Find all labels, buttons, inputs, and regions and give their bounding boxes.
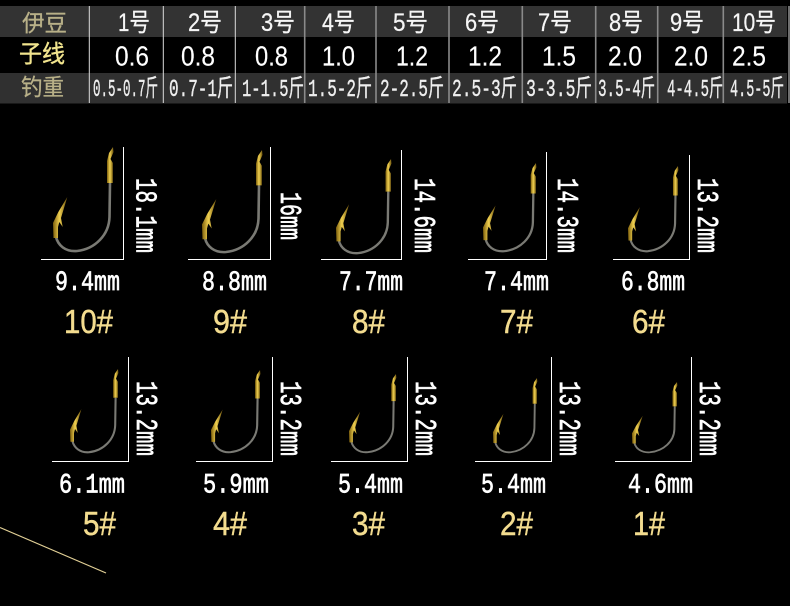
hook 3#: 3# <box>352 505 386 542</box>
hook 6# <box>613 155 723 340</box>
hook 9#: 9# <box>213 303 248 340</box>
hook 10#: 18.1mm <box>126 178 162 253</box>
row 1: model: 1号 <box>118 9 150 37</box>
row 3: fish weight: 1-1.5斤 <box>242 75 304 104</box>
hook 8#: 14.6mm <box>405 178 440 253</box>
row 1: model: 2号 <box>188 9 222 37</box>
hook 1#: 1# <box>633 505 666 542</box>
hook 8#: 7.7mm <box>339 268 403 299</box>
hook 9#: 16mm <box>271 192 306 240</box>
hook 5#: 6.1mm <box>59 471 125 502</box>
row 2: leader line <box>19 40 766 72</box>
row 3: fish weight <box>21 74 784 104</box>
hook 2#: 13.2mm <box>550 381 585 456</box>
row 2: leader line: 2.0 <box>674 40 708 72</box>
row 3: fish weight: 2-2.5斤 <box>380 75 444 104</box>
hook 4#: 5.9mm <box>203 471 269 502</box>
row 2: leader line: 0.6 <box>115 40 149 72</box>
hook 10# <box>41 147 162 340</box>
row 2: leader line: 0.8 <box>181 40 215 72</box>
hook 7#: 7.4mm <box>484 268 549 299</box>
size table <box>0 6 789 104</box>
hook 4#: 13.2mm <box>271 381 306 456</box>
row 3: fish weight: 4-4.5斤 <box>667 75 723 104</box>
hook 6#: 13.2mm <box>688 178 723 253</box>
hook 5#: 13.2mm <box>127 381 162 456</box>
hook 2# <box>475 357 585 542</box>
row 2: leader line: 子线 <box>19 41 65 68</box>
hook 3# <box>331 357 441 542</box>
row 1: model: 10号 <box>732 9 776 37</box>
hook 1# <box>615 357 725 542</box>
row 1: model: 7号 <box>538 9 572 37</box>
row 2: leader line: 1.2 <box>396 40 428 72</box>
hook 4# <box>196 357 306 542</box>
hook 1#: 13.2mm <box>690 381 725 456</box>
row 3: fish weight: 3-3.5斤 <box>526 75 592 104</box>
row 1: model: 9号 <box>670 9 704 37</box>
hook 3#: 5.4mm <box>338 471 403 502</box>
row 1: model: 4号 <box>322 9 355 37</box>
hook 4#: 4# <box>213 505 248 542</box>
row 3: fish weight: 0.7-1斤 <box>169 75 233 104</box>
hook 7#: 14.3mm <box>548 178 583 253</box>
table row bands <box>0 6 787 104</box>
row 2: leader line: 1.2 <box>468 40 502 72</box>
hook 2#: 2# <box>500 505 534 542</box>
row 2: leader line: 2.0 <box>608 40 642 72</box>
hook 9# <box>188 147 306 340</box>
column dividers <box>89 6 789 103</box>
hook 6#: 6# <box>632 303 666 340</box>
row 1: model: 6号 <box>465 9 499 37</box>
row 3: fish weight: 钓重 <box>21 74 64 100</box>
row 1: model: 8号 <box>609 9 643 37</box>
row 3: fish weight: 0.5-0.7斤 <box>93 75 158 104</box>
hook 10#: 9.4mm <box>55 268 120 299</box>
row 1: model: 5号 <box>393 9 428 37</box>
hook 7#: 7# <box>500 303 534 340</box>
row 2: leader line: 1.5 <box>542 40 576 72</box>
row 1: model <box>22 9 776 37</box>
row 3: fish weight: 3.5-4斤 <box>598 75 655 104</box>
hook 2#: 5.4mm <box>481 471 546 502</box>
hook 9#: 8.8mm <box>202 268 267 299</box>
row 2: leader line: 1.0 <box>322 40 355 72</box>
row 1: model: 伊豆 <box>22 10 67 36</box>
hook 5#: 5# <box>83 505 117 542</box>
row 3: fish weight: 2.5-3斤 <box>452 75 517 104</box>
hook 6#: 6.8mm <box>621 268 685 299</box>
row 2: leader line: 2.5 <box>732 40 766 72</box>
hook 3#: 13.2mm <box>406 381 441 456</box>
row 3: fish weight: 1.5-2斤 <box>308 75 372 104</box>
hook 1#: 4.6mm <box>628 471 693 502</box>
hook 7# <box>468 152 583 340</box>
hook 5# <box>52 357 162 542</box>
row 2: leader line: 0.8 <box>255 40 288 72</box>
row 1: model: 3号 <box>261 9 295 37</box>
hook 8#: 8# <box>352 303 386 340</box>
diagonal gold line <box>0 528 106 573</box>
hook 10#: 10# <box>64 303 114 340</box>
hook 8# <box>321 150 440 340</box>
